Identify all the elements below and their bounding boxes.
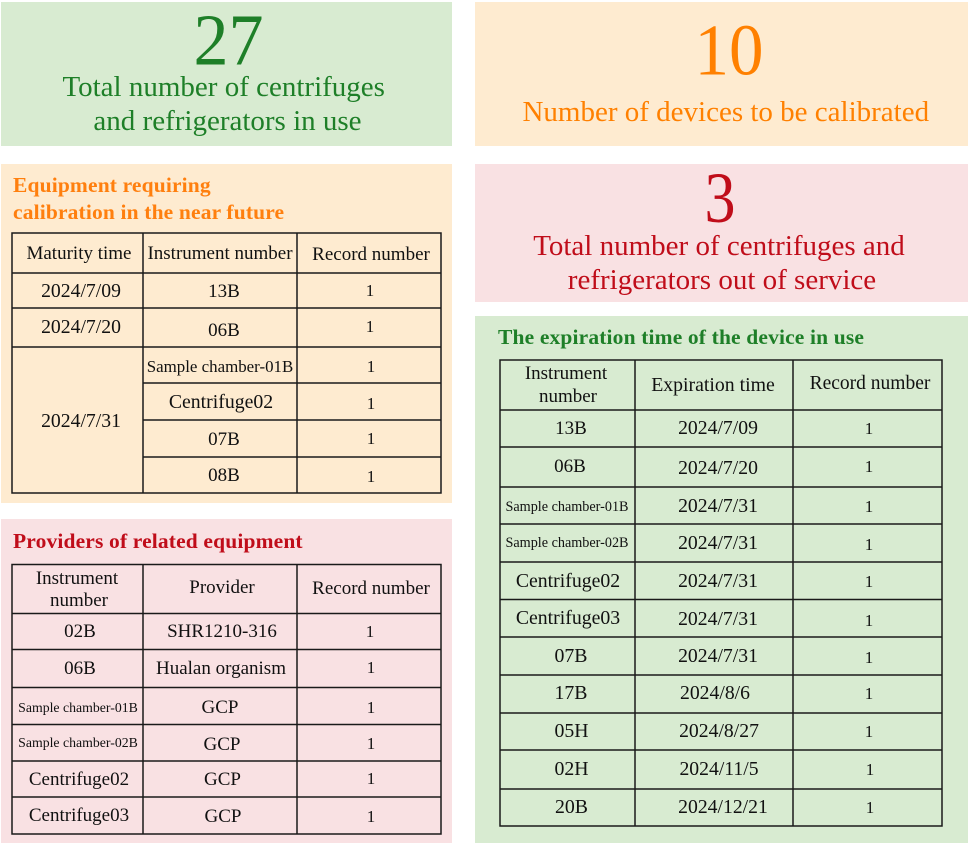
table: providers: GCP	[204, 769, 241, 790]
table: providers: GCP	[204, 734, 240, 755]
table: providers: Centrifuge03	[29, 805, 129, 826]
table: calibration schedule: 1	[367, 357, 375, 376]
label: total in use: and refrigerators in use	[93, 105, 362, 137]
panel: devices to be calibrated	[475, 2, 968, 146]
panel: equipment requiring calibration	[1, 164, 452, 503]
table: providers: Record number	[312, 578, 430, 599]
heading: equipment requiring calibration: Equipment requiring	[13, 173, 211, 197]
table: expiration times: 1	[865, 497, 873, 516]
table: providers: Sample chamber-01B	[18, 700, 138, 715]
table: expiration times: 17B	[555, 682, 587, 704]
table: providers: 1	[366, 622, 374, 641]
table: calibration schedule: 2024/7/31	[41, 410, 121, 432]
table: expiration times: 1	[865, 722, 873, 741]
table: providers: SHR1210-316	[167, 621, 277, 642]
table: expiration times	[500, 360, 942, 826]
table: expiration times: 05H	[554, 720, 589, 742]
table: providers	[12, 564, 441, 834]
table: calibration schedule: 08B	[208, 465, 240, 486]
table: expiration times: number	[539, 386, 598, 407]
table: providers: 1	[367, 807, 375, 826]
table: expiration times: 2024/8/27	[679, 720, 759, 742]
table: providers: number	[50, 590, 109, 611]
label: out of service: Total number of centrifuges and	[533, 230, 905, 262]
label: devices to be calibrated: Number of devices to be calibrated	[522, 96, 930, 128]
table: expiration times: 1	[865, 611, 873, 630]
table: providers: Sample chamber-02B	[18, 735, 138, 750]
heading: expiration time: The expiration time of the device in use	[498, 325, 864, 349]
big number 10: 10	[694, 10, 764, 90]
table: calibration schedule: Sample chamber-01B	[147, 357, 293, 376]
table: expiration times: 2024/7/31	[678, 495, 758, 517]
panel: total in use	[1, 0, 452, 146]
table: expiration times: 1	[865, 648, 873, 667]
table: expiration times: Sample chamber-01B	[505, 499, 629, 515]
heading: providers: Providers of related equipment	[13, 529, 303, 553]
big number 3: 3	[704, 158, 736, 238]
table: expiration times: 2024/11/5	[679, 758, 759, 780]
table: calibration schedule: 07B	[208, 429, 240, 450]
table: providers: 1	[367, 698, 375, 717]
table: calibration schedule: 2024/7/20	[41, 316, 121, 338]
table: expiration times: 1	[866, 798, 874, 817]
panel: providers of related equipment	[1, 519, 452, 843]
table: providers: Hualan organism	[156, 658, 286, 679]
table: expiration times: 1	[865, 457, 873, 476]
table: providers: GCP	[202, 697, 238, 718]
table: expiration times: 2024/7/31	[678, 570, 758, 592]
table: providers: 06B	[64, 658, 96, 679]
table: expiration times: 2024/7/31	[678, 532, 758, 554]
table: expiration times: 06B	[554, 456, 586, 477]
table: providers: 1	[367, 734, 375, 753]
table: expiration times: 1	[865, 684, 873, 703]
panel: expiration time of devices in use	[475, 316, 968, 843]
table: providers: 1	[367, 769, 375, 788]
table: expiration times: 02H	[554, 758, 589, 780]
table: calibration schedule: 1	[366, 317, 374, 336]
table: providers: 02B	[64, 621, 96, 642]
table: expiration times: 1	[865, 419, 873, 438]
table: calibration schedule: Maturity time	[26, 243, 132, 264]
table: calibration schedule: 06B	[208, 320, 240, 341]
table: calibration schedule: 13B	[208, 281, 240, 302]
table: providers: 1	[367, 658, 375, 677]
table: calibration schedule: 2024/7/09	[41, 280, 121, 302]
table: calibration schedule: 1	[367, 467, 375, 486]
table: expiration times: Centrifuge03	[516, 607, 620, 629]
table: expiration times: 2024/7/31	[678, 608, 758, 630]
table: expiration times: Expiration time	[651, 374, 775, 396]
table: calibration schedule: 1	[366, 281, 374, 300]
table: providers: Instrument	[36, 568, 119, 589]
table: expiration times: 13B	[555, 418, 587, 439]
table: expiration times: Instrument	[525, 363, 608, 384]
table: expiration times: 1	[865, 572, 873, 591]
table: expiration times: Centrifuge02	[516, 570, 620, 592]
table: calibration schedule: 1	[367, 394, 375, 413]
table: calibration schedule: Record number	[312, 244, 430, 265]
table: expiration times: Sample chamber-02B	[505, 535, 629, 551]
panel: out of service	[475, 158, 968, 302]
table: providers: Centrifuge02	[29, 769, 129, 790]
table: calibration schedule: 1	[367, 429, 375, 448]
table: expiration times: 20B	[555, 796, 588, 818]
table: expiration times: Record number	[810, 373, 931, 394]
table: expiration times: 1	[865, 535, 873, 554]
table: providers: GCP	[205, 806, 241, 827]
label: out of service: refrigerators out of service	[568, 264, 876, 296]
table: expiration times: 2024/7/31	[678, 645, 758, 667]
table: expiration times: 2024/12/21	[678, 796, 768, 818]
table: calibration schedule: Centrifuge02	[169, 391, 273, 413]
table: calibration schedule	[12, 233, 441, 493]
table: expiration times: 2024/7/09	[678, 417, 758, 439]
table: providers: Provider	[189, 577, 255, 598]
heading: equipment requiring calibration: calibration in the near future	[13, 200, 284, 224]
table: calibration schedule: Instrument number	[147, 243, 293, 264]
table: expiration times: 2024/7/20	[678, 457, 758, 479]
table: expiration times: 2024/8/6	[680, 682, 750, 704]
table: expiration times: 1	[866, 760, 874, 779]
table: expiration times: 07B	[555, 645, 587, 667]
label: total in use: Total number of centrifuges	[62, 71, 385, 103]
big number 27: 27	[194, 0, 264, 80]
